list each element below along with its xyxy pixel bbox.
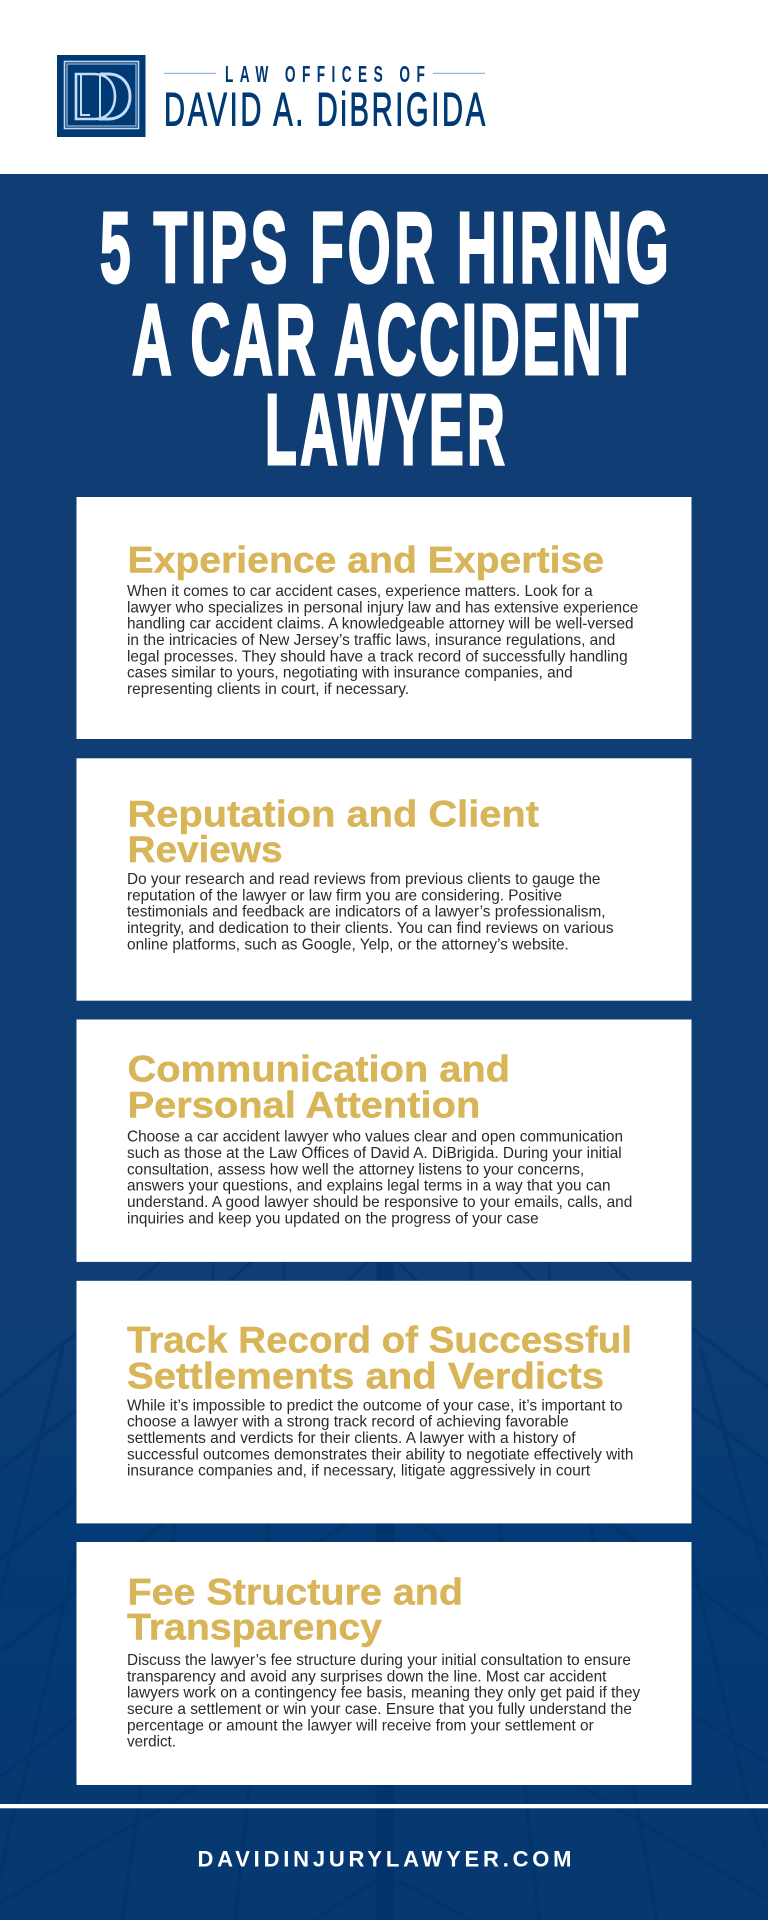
heading: fee structure: Fee Structure and	[128, 1571, 463, 1612]
body: fee structure: lawyers work on a contingency fee basis, meaning they only get paid if they	[127, 1685, 640, 1702]
title: A CAR ACCIDENT	[132, 285, 638, 396]
body: reputation and client reviews	[127, 871, 614, 953]
background line pattern	[0, 1255, 768, 1920]
title	[100, 193, 669, 485]
body: reputation and client reviews: online platforms, such as Google, Yelp, or the attorney’s website.	[127, 936, 569, 953]
footer url: DAVIDINJURYLAWYER.COM	[198, 1847, 572, 1872]
body: track record: settlements and verdicts for their clients. A lawyer with a history of	[127, 1430, 576, 1447]
heading: communication and personal attention	[128, 1049, 510, 1125]
body: communication and personal attention: answers your questions, and explains legal terms in a way that you can	[127, 1178, 611, 1195]
body: experience and expertise	[127, 583, 638, 698]
logo rule right	[433, 73, 485, 74]
logo text: law offices of: LAW OFFICES OF	[225, 61, 425, 87]
panel: experience and expertise	[76, 497, 692, 739]
body: fee structure	[127, 1652, 640, 1751]
body: communication and personal attention: Choose a car accident lawyer who values clear and open communication	[127, 1129, 623, 1146]
heading: reputation and client reviews: Reviews	[128, 829, 282, 870]
body: experience and expertise: When it comes to car accident cases, experience matters. Look for a	[127, 583, 593, 600]
body: reputation and client reviews: testimonials and feedback are indicators of a lawyer’s professionalism,	[127, 904, 606, 921]
heading: fee structure	[127, 1571, 463, 1648]
body: fee structure: transparency and avoid any surprises down the line. Most car accident	[127, 1668, 607, 1685]
body: track record: choose a lawyer with a strong track record of achieving favorable	[127, 1414, 569, 1431]
panel: fee structure	[76, 1542, 692, 1785]
logo	[57, 55, 485, 137]
logo text: firm name: DAVID A. DiBRIGIDA	[164, 85, 485, 136]
footer divider	[0, 1804, 768, 1808]
heading: reputation and client reviews	[128, 794, 539, 870]
body: experience and expertise: cases similar to yours, negotiating with insurance companies, and	[127, 665, 573, 682]
body: communication and personal attention: consultation, assess how well the attorney listens to your concerns,	[127, 1161, 584, 1178]
panel: track record	[76, 1281, 692, 1523]
body: experience and expertise: handling car accident claims. A knowledgeable attorney will be well-versed	[127, 616, 634, 633]
body: reputation and client reviews: integrity, and dedication to their clients. You can find reviews on various	[127, 920, 614, 937]
body: fee structure: verdict.	[127, 1734, 176, 1751]
icon: DD monogram	[57, 55, 146, 137]
heading: experience and expertise: Experience and Expertise	[128, 540, 604, 581]
body: track record: While it’s impossible to predict the outcome of your case, it’s important to	[127, 1397, 623, 1414]
heading: reputation and client reviews: Reputation and Client	[128, 794, 539, 835]
heading: communication and personal attention: Communication and	[128, 1049, 510, 1090]
body: communication and personal attention: such as those at the Law Offices of David A. DiBrigida. During your initial	[127, 1145, 622, 1162]
title: 5 TIPS FOR HIRING	[100, 193, 669, 304]
heading: track record	[127, 1320, 632, 1396]
heading: fee structure: Transparency	[127, 1607, 382, 1648]
body: communication and personal attention	[127, 1129, 632, 1227]
body: experience and expertise: lawyer who specializes in personal injury law and has extensive experience	[127, 599, 638, 616]
body: track record	[127, 1397, 633, 1480]
logo rule left	[164, 73, 216, 74]
body: fee structure: Discuss the lawyer’s fee structure during your initial consultation to ensure	[127, 1652, 631, 1669]
panel: communication and personal attention	[76, 1020, 692, 1262]
body: communication and personal attention: inquiries and keep you updated on the progress of your case	[127, 1210, 539, 1227]
body: experience and expertise: legal processes. They should have a track record of successfully handling	[127, 648, 628, 665]
body: track record: insurance companies and, if necessary, litigate aggressively in court	[127, 1463, 591, 1480]
header band	[0, 0, 768, 174]
title: LAWYER	[265, 374, 505, 485]
body: fee structure: secure a settlement or win your case. Ensure that you fully understand the	[127, 1701, 632, 1718]
heading: track record: Track Record of Successful	[127, 1320, 632, 1361]
panel: reputation and client reviews	[76, 758, 692, 1001]
body: reputation and client reviews: Do your research and read reviews from previous clients to gauge the	[127, 871, 600, 888]
body: communication and personal attention: understand. A good lawyer should be responsive to your emails, calls, and	[127, 1194, 632, 1211]
body: fee structure: percentage or amount the lawyer will receive from your settlement or	[127, 1717, 594, 1734]
body: experience and expertise: in the intricacies of New Jersey’s traffic laws, insurance regulations, and	[127, 632, 615, 649]
body: reputation and client reviews: reputation of the lawyer or law firm you are considering. Positive	[127, 887, 562, 904]
body: experience and expertise: representing clients in court, if necessary.	[127, 681, 409, 698]
heading: communication and personal attention: Personal Attention	[128, 1084, 480, 1125]
heading: track record: Settlements and Verdicts	[127, 1355, 604, 1396]
body: track record: successful outcomes demonstrates their ability to negotiate effectively with	[127, 1446, 633, 1463]
